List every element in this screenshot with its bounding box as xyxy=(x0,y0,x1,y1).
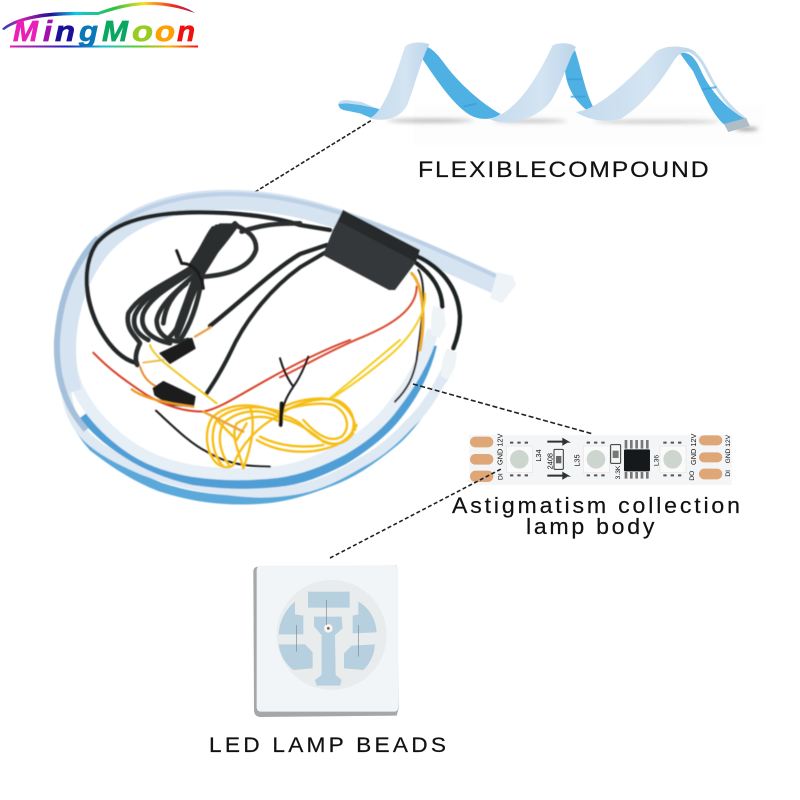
connectors: strip end sleeves xyxy=(431,306,446,338)
wires: black bundle and coil xyxy=(87,212,330,407)
board silkscreen labels: L36 xyxy=(653,455,660,466)
strip: upper strip end cap xyxy=(490,272,516,303)
strip: second strip blue core xyxy=(72,375,445,500)
logo: MingMoon: M xyxy=(13,16,39,48)
ribbon: flexible compound strip xyxy=(338,43,763,145)
LED strip board xyxy=(469,434,732,485)
board silkscreen labels: GND 12V xyxy=(689,434,698,465)
board silkscreen labels: GND 12V xyxy=(496,434,505,465)
strip: left blue-grey edge xyxy=(57,238,98,430)
board silkscreen labels: 3.3K xyxy=(615,465,622,479)
logo: MingMoon xyxy=(2,2,198,48)
bead contact pads xyxy=(279,592,377,686)
control box xyxy=(323,210,420,290)
board silkscreen labels: 2408 xyxy=(546,453,555,469)
logo: MingMoon: o xyxy=(155,16,175,48)
board silkscreen labels: GND 12V xyxy=(725,434,732,463)
logo: MingMoon: i xyxy=(43,16,53,48)
LED chips xyxy=(507,443,686,475)
bead centre die xyxy=(324,624,333,633)
board silkscreen labels: L35 xyxy=(572,454,581,467)
wires: yellow coil, red and black leads xyxy=(93,340,400,468)
bead lens circle xyxy=(277,580,387,690)
dashed leader to LED bead xyxy=(330,468,503,558)
board silkscreen labels: DO xyxy=(689,471,696,481)
product: LED strips with wiring xyxy=(57,194,516,500)
driver chip xyxy=(624,440,650,479)
board silkscreen labels: DI xyxy=(725,470,732,477)
label: Astigmatism collection lamp body: lamp body xyxy=(526,514,657,539)
dashed leader to ribbon xyxy=(255,120,372,192)
bond wires xyxy=(297,600,358,657)
board silkscreen labels: L34 xyxy=(534,449,543,462)
dashed leader to LED strip board xyxy=(413,384,593,434)
heading: FLEXIBLECOMPOUND: FLEXIBLECOMPOUND xyxy=(418,158,710,183)
label: Astigmatism collection lamp body xyxy=(452,493,743,539)
strip: second strip pale cover xyxy=(66,362,450,493)
logo: MingMoon: M xyxy=(102,16,129,48)
strip: upper band body xyxy=(66,200,505,392)
logo: MingMoon: g xyxy=(78,16,98,48)
board silkscreen labels xyxy=(496,434,732,481)
logo: MingMoon: n xyxy=(55,16,75,48)
solder pads right xyxy=(699,435,722,479)
label: Astigmatism collection lamp body: Astigmatism collection xyxy=(452,493,743,518)
resistors xyxy=(554,445,621,469)
logo: MingMoon: o xyxy=(132,16,153,48)
solder pads left xyxy=(470,437,493,482)
wires: right side leads xyxy=(280,256,460,402)
strip: top highlight xyxy=(98,194,500,278)
label: LED LAMP BEADS: LED LAMP BEADS xyxy=(209,733,449,757)
logo: MingMoon: n xyxy=(177,16,195,48)
board silkscreen labels: DI xyxy=(498,473,505,480)
strip: inner strip blue core xyxy=(84,345,432,484)
bead body xyxy=(257,566,398,712)
LED lamp bead xyxy=(253,566,399,717)
strip: upper translucent strip continuing into the inner strip xyxy=(69,202,505,474)
direction arrows xyxy=(547,439,567,478)
